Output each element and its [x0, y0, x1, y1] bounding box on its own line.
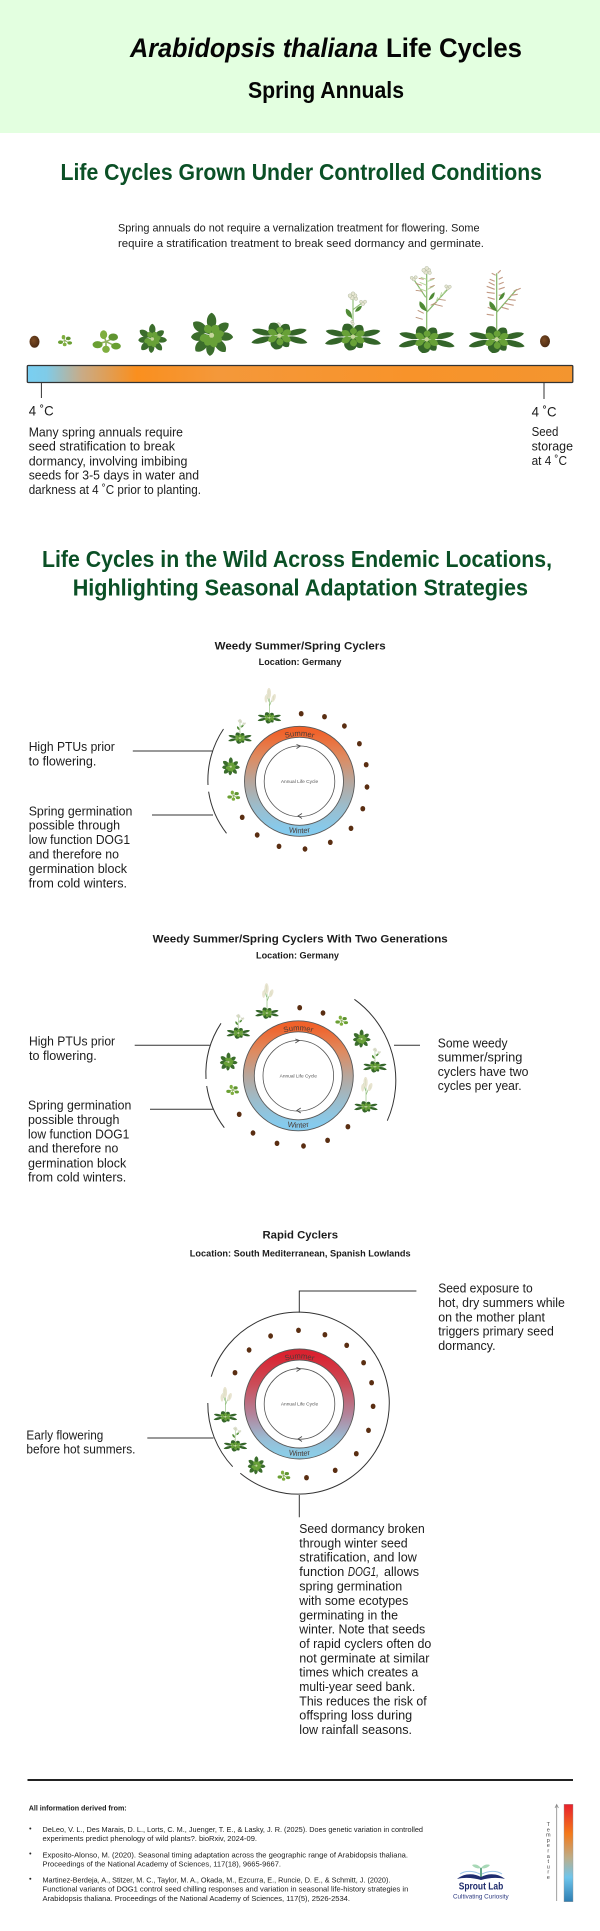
callout: spring germination: low function DOG1 — [29, 833, 130, 847]
callout: spring germination: from cold winters. — [28, 1171, 126, 1185]
callout: seed dormancy broken: spring germination — [299, 1579, 402, 1593]
left tick: 4 degrees: 4 ˚C — [29, 403, 54, 419]
icon: small rosette — [138, 324, 167, 353]
life cycle ring: Annual Life Cycle — [281, 1402, 318, 1408]
life cycle ring: Winter — [289, 1450, 310, 1456]
callout: high PTUs: to flowering. — [29, 755, 96, 769]
icon: budding rosette — [251, 320, 308, 351]
callout: two cycles per year: cyclers have two — [438, 1065, 529, 1079]
icon: flowering plant — [324, 292, 382, 352]
seeds around cycle — [237, 1005, 350, 1149]
location label: Location: South Mediterranean, Spanish Lowlands — [190, 1248, 411, 1258]
callout: seed dormancy broken: stratification, and low — [299, 1551, 418, 1565]
main title — [129, 33, 522, 63]
bracket: spring germination — [152, 792, 226, 833]
callout: spring germination: from cold winters. — [29, 876, 127, 890]
panel title: Weedy Summer/Spring Cyclers — [215, 640, 386, 652]
bracket: high PTUs — [135, 1023, 221, 1079]
life cycle ring: Annual Life Cycle — [280, 1073, 317, 1079]
bracket: seed exposure — [211, 1291, 416, 1517]
icon: senescing plant — [468, 270, 525, 355]
panel title: Rapid Cyclers — [262, 1229, 338, 1241]
text: stratification note: dormancy, involving imbibing — [29, 454, 188, 468]
life cycle ring: Winter — [289, 827, 310, 834]
text: seed storage note: storage — [532, 440, 573, 454]
seeds around cycle — [233, 1328, 376, 1480]
logo: Sprout Lab — [453, 1864, 509, 1901]
icon: seed — [30, 336, 40, 348]
callout: two cycles per year: Some weedy — [438, 1036, 508, 1050]
callout: seed exposure: Seed exposure to — [438, 1282, 533, 1296]
callout: seed exposure: dormancy. — [438, 1339, 496, 1353]
reference: Exposito-Alonso — [29, 1850, 408, 1868]
life cycle ring — [242, 1020, 354, 1132]
callout: high PTUs: High PTUs prior — [29, 740, 115, 754]
callout: seed dormancy broken: winter. Note that seeds — [298, 1622, 425, 1636]
references — [29, 1804, 423, 1903]
callout: seed dormancy broken: times which creates a — [299, 1666, 418, 1680]
text: seed storage note: at 4 ˚C — [532, 454, 567, 468]
temperature gradient bar — [564, 1804, 573, 1902]
callout: seed exposure: triggers primary seed — [438, 1325, 554, 1339]
plants around cycle — [220, 983, 387, 1113]
text: seed storage note: Seed — [532, 425, 558, 439]
temperature timeline bar — [27, 366, 573, 382]
callout: early flowering: before hot summers. — [26, 1442, 135, 1456]
icon: young rosette — [93, 330, 121, 353]
logo: Sprout Lab: Sprout Lab — [459, 1880, 503, 1892]
callout: two cycles per year: summer/spring — [438, 1051, 522, 1065]
temperature arrow — [555, 1804, 558, 1901]
plant growth sequence — [30, 266, 550, 356]
callout: seed dormancy broken: This reduces the risk of — [299, 1694, 427, 1708]
temperature label: Temperature — [546, 1822, 551, 1881]
subtitle: Spring Annuals — [248, 77, 404, 103]
intro text block: Spring annuals do not require a vernalization treatment for flowering. Some — [118, 223, 480, 235]
callout: high PTUs — [29, 740, 115, 769]
bracket: early flowering — [147, 1403, 233, 1467]
callout: seed dormancy broken: through winter seed — [299, 1536, 408, 1550]
callout: seed dormancy broken: allows — [384, 1565, 419, 1579]
reference: Exposito-Alonso: Exposito-Alonso, M. (2020). Seasonal timing adaptation across the geographic range of Arabidopsis thaliana. — [42, 1850, 408, 1859]
callout: seed dormancy broken — [298, 1522, 431, 1737]
text: stratification note: seeds for 3-5 days in water and — [29, 468, 199, 482]
callout: seed dormancy broken: low rainfall seasons. — [299, 1723, 412, 1737]
plants around cycle — [213, 1387, 290, 1481]
callout: seed exposure: on the mother plant — [438, 1310, 546, 1324]
callout: spring germination: low function DOG1 — [28, 1127, 129, 1141]
callout: two cycles per year: cycles per year. — [438, 1079, 522, 1093]
callout: seed dormancy broken: not germinate at similar — [299, 1651, 429, 1665]
life cycle ring — [244, 726, 355, 837]
bracket: spring germination — [150, 1086, 224, 1128]
legend: temperature scale — [546, 1804, 573, 1902]
heading: wild life cycles: Life Cycles in the Wild Across Endemic Locations, — [42, 546, 552, 572]
reference: Exposito-Alonso: Proceedings of the National Academy of Sciences, 117(18), 9665-9667. — [42, 1859, 281, 1868]
callout: early flowering — [26, 1428, 135, 1456]
life cycle ring: Summer — [284, 732, 314, 738]
reference: DeLeo: DeLeo, V. L., Des Marais, D. L., Lorts, C. M., Juenger, T. E., & Lasky, J. R. (2025). Does genetic variation in controlled — [42, 1825, 423, 1834]
reference: Martinez-Berdeja — [29, 1876, 408, 1903]
location label: Location: Germany — [259, 657, 341, 667]
panel: weedy cyclers with two generations — [28, 934, 529, 1185]
callout: spring germination — [29, 804, 132, 890]
right tick: 4 degrees: 4 ˚C — [532, 404, 557, 420]
panel: rapid cyclers — [26, 1229, 565, 1737]
callout: spring germination: Spring germination — [28, 1099, 131, 1113]
heading: wild life cycles: Highlighting Seasonal Adaptation Strategies — [73, 574, 528, 600]
text: stratification note: Many spring annuals require — [29, 426, 183, 440]
callout: seed dormancy broken: germinating in the — [299, 1608, 398, 1622]
main title: Life Cycles — [386, 33, 522, 63]
callout: seed dormancy broken: of rapid cyclers often do — [299, 1637, 431, 1651]
life cycle ring — [244, 1348, 355, 1460]
callout: early flowering: Early flowering — [26, 1428, 103, 1442]
callout: seed dormancy broken: multi-year seed bank. — [299, 1680, 415, 1694]
panel: weedy summer/spring cyclers — [28, 640, 386, 890]
callout: spring germination: and therefore no — [28, 1142, 118, 1156]
intro text block — [118, 223, 484, 250]
callout: high PTUs: High PTUs prior — [29, 1035, 115, 1049]
seeds around cycle — [240, 711, 369, 852]
callout: seed dormancy broken: Seed dormancy broken — [299, 1522, 425, 1536]
callout: two cycles per year — [438, 1036, 529, 1093]
life cycle ring: Summer — [284, 1354, 314, 1360]
callout: seed dormancy broken: with some ecotypes — [298, 1594, 408, 1608]
icon: full rosette — [190, 313, 233, 356]
callout: seed dormancy broken: DOG1, — [348, 1565, 379, 1579]
callout: spring germination — [28, 1099, 131, 1185]
icon: fruiting plant — [398, 266, 455, 355]
callout: seed exposure — [438, 1282, 565, 1353]
panel title: Weedy Summer/Spring Cyclers With Two Generations — [153, 934, 448, 946]
callout: spring germination: Spring germination — [29, 804, 132, 818]
life cycle ring: Winter — [288, 1122, 308, 1128]
right tick: 4 degrees — [532, 382, 557, 420]
callout: high PTUs — [29, 1035, 115, 1063]
header banner — [0, 0, 600, 133]
reference: DeLeo: experiments predict phenology of wild plants?. bioRxiv, 2024-09. — [42, 1834, 257, 1843]
callout: spring germination: possible through — [29, 819, 120, 833]
intro text block: require a stratification treatment to break seed dormancy and germinate. — [118, 238, 484, 250]
reference: DeLeo — [29, 1825, 423, 1843]
text: stratification note: darkness at 4 ˚C prior to planting. — [29, 483, 201, 497]
callout: seed dormancy broken: offspring loss during — [299, 1709, 412, 1723]
callout: spring germination: germination block — [29, 862, 128, 876]
icon: harvested seed — [540, 335, 550, 347]
footer divider — [28, 1779, 573, 1781]
plants around cycle — [222, 688, 281, 801]
icon: sprout over book — [457, 1864, 505, 1880]
location label: Location: Germany — [256, 951, 339, 961]
callout: spring germination: and therefore no — [29, 848, 119, 862]
reference: Martinez-Berdeja: Functional variants of DOG1 control seed chilling responses and variation in seasonal life-history strategies in — [42, 1885, 408, 1894]
text: stratification note: seed stratification to break — [29, 440, 176, 454]
callout: seed exposure: hot, dry summers while — [438, 1296, 565, 1310]
callout: high PTUs: to flowering. — [29, 1049, 97, 1063]
logo: Sprout Lab: Cultivating Curiosity — [453, 1894, 509, 1901]
text: seed storage note — [532, 425, 573, 468]
life cycle ring: Summer — [284, 1026, 314, 1032]
callout: seed dormancy broken: function — [299, 1565, 344, 1579]
callout: spring germination: germination block — [28, 1156, 127, 1170]
references heading: All information derived from: — [29, 1804, 127, 1813]
icon: seedling — [58, 335, 72, 346]
left tick: 4 degrees — [29, 382, 54, 419]
heading: controlled conditions: Life Cycles Grown Under Controlled Conditions — [60, 159, 542, 185]
main title: Arabidopsis thaliana — [129, 33, 378, 63]
reference: Martinez-Berdeja: Arabidopsis thaliana. Proceedings of the National Academy of Sciences, 117(5), 2526-2534. — [42, 1894, 350, 1903]
bracket: high PTUs — [133, 729, 224, 785]
bracket: two cycles — [354, 999, 420, 1121]
life cycle ring: Annual Life Cycle — [281, 779, 318, 785]
reference: Martinez-Berdeja: Martinez-Berdeja, A., Stitzer, M. C., Taylor, M. A., Okada, M., Ezcurra, E., Runcie, D. E., & Schmitt, J. (2020). — [42, 1876, 390, 1885]
heading: wild life cycles — [42, 546, 552, 600]
text: stratification note — [29, 426, 201, 497]
callout: spring germination: possible through — [28, 1113, 119, 1127]
